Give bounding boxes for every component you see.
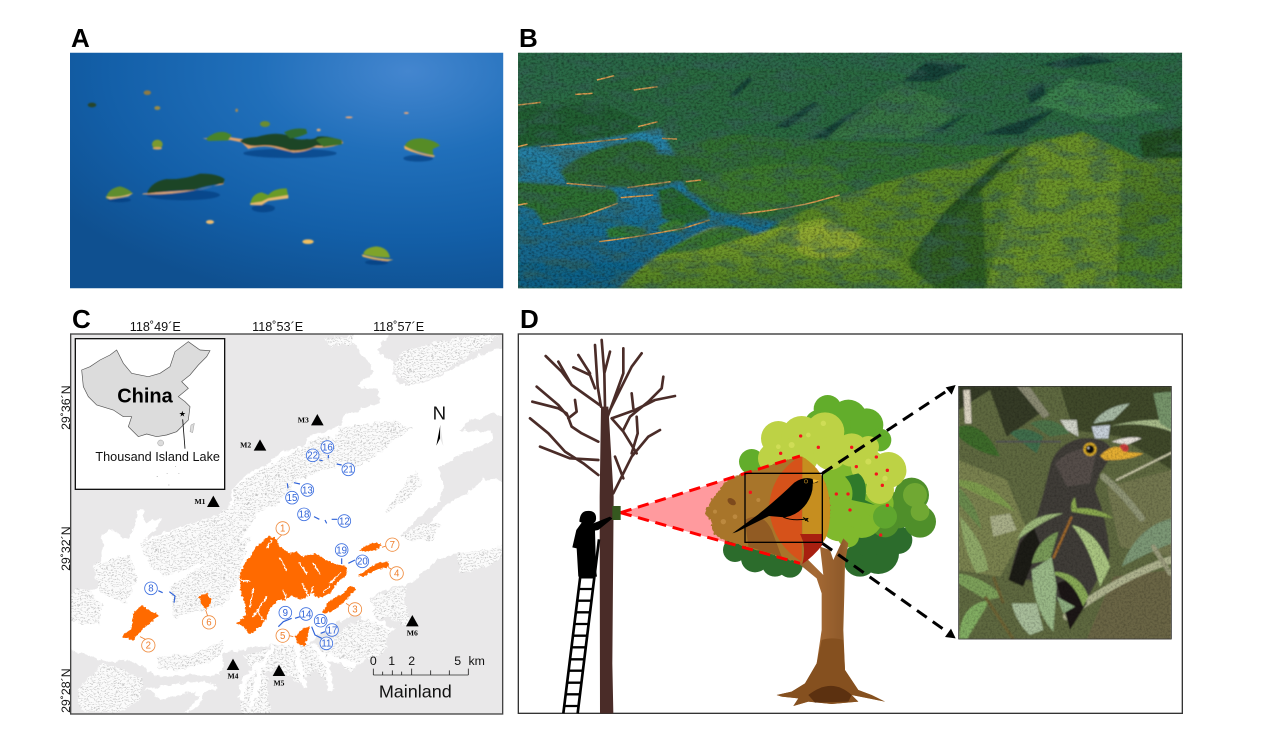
photo: branches	[997, 442, 1172, 617]
longitude labels	[130, 320, 424, 334]
small islands	[88, 90, 440, 261]
scale bar: 0	[370, 654, 377, 668]
mid hills	[671, 135, 1052, 215]
blue marker numbers: 9	[283, 608, 288, 619]
blue marker numbers: 22	[307, 451, 318, 462]
orange numbered markers	[142, 522, 403, 652]
longitude labels: 118˚49´E	[130, 320, 181, 334]
person silhouette	[572, 511, 612, 577]
blue marker numbers: 20	[357, 557, 368, 568]
narrow inlets on the south shore	[242, 643, 357, 707]
camera	[612, 506, 621, 520]
longitude labels: 118˚53´E	[252, 320, 303, 334]
inset map of China	[75, 339, 225, 489]
canopy: right olive foliage	[871, 478, 936, 538]
mainland sites M1 to M6: M1	[194, 497, 206, 506]
orange marker numbers: 2	[146, 641, 151, 652]
canopy: yellow-green foliage	[758, 412, 906, 504]
canopy: dark lower foliage	[723, 523, 912, 578]
dashed arrow to photo, bottom	[822, 543, 956, 638]
orange marker numbers: 4	[394, 569, 400, 580]
blue marker numbers: 16	[322, 442, 333, 453]
island shadows	[108, 149, 433, 265]
longitude labels: 118˚57´E	[373, 320, 424, 334]
canopy: lighter leaf dots	[776, 421, 888, 481]
orange study islands 1 to 7	[122, 536, 389, 647]
Mainland label: Mainland	[379, 681, 452, 701]
blue marker numbers: 18	[299, 510, 309, 521]
latitude labels: 29˚36´N	[59, 385, 73, 430]
ladder	[563, 539, 599, 713]
shoreline	[518, 76, 840, 242]
white inlets on the main island	[240, 540, 340, 620]
blue study islands 8 to 22	[158, 455, 355, 638]
north arrow: N	[433, 402, 446, 423]
blue marker numbers: 19	[336, 545, 347, 556]
blue marker numbers	[148, 442, 368, 650]
mainland sites M1 to M6: M3	[298, 415, 309, 424]
dashed arrow to photo, top	[822, 385, 956, 473]
bird silhouette	[732, 478, 819, 533]
mainland sites M1 to M6	[194, 414, 419, 687]
lake water	[63, 328, 508, 677]
orange marker numbers: 5	[280, 631, 285, 642]
panel D photo: bird with fruit in foliage	[958, 386, 1172, 639]
far hills	[518, 62, 1182, 158]
island: lower long	[142, 182, 224, 194]
photo: background blotches	[958, 386, 1172, 639]
red fruits	[779, 434, 889, 537]
photo: eye	[1083, 443, 1097, 456]
mainland sites M1 to M6: M4	[227, 672, 239, 681]
panel C: study-area map	[59, 320, 508, 714]
blue marker numbers: 10	[315, 616, 326, 627]
photo: blackbird	[1008, 437, 1143, 630]
blue numbered markers	[145, 441, 369, 650]
forest mottling	[518, 53, 1182, 288]
latitude labels: 29˚28´N	[59, 668, 73, 713]
camera view cone	[621, 456, 830, 564]
right mountain	[779, 132, 1182, 288]
blue marker numbers: 21	[343, 465, 354, 476]
islands	[559, 139, 684, 188]
panel B: aerial photo of forested hills and lake	[518, 53, 1182, 288]
speckled island clusters	[71, 335, 503, 714]
blue marker numbers: 17	[327, 625, 337, 636]
canopy: top mid-green foliage	[739, 395, 891, 482]
panel frame	[518, 334, 1182, 713]
scale bar: 5	[454, 654, 461, 668]
blue marker numbers: 12	[339, 516, 350, 527]
panel label A: A	[71, 23, 90, 53]
north arrow	[433, 402, 446, 446]
right-hand and northern mainland	[378, 334, 502, 386]
water	[518, 127, 779, 288]
mainland sites M1 to M6: M2	[240, 440, 251, 449]
blue marker numbers: 8	[148, 584, 154, 595]
leader lines	[140, 534, 392, 640]
orange marker numbers: 7	[390, 540, 395, 551]
latitude labels	[59, 385, 73, 713]
panel label C: C	[72, 304, 91, 334]
canopy: central bright foliage	[819, 463, 894, 547]
inset map of China: Thousand Island Lake	[95, 450, 220, 464]
blue marker numbers: 14	[301, 609, 312, 620]
photo frame	[958, 386, 1172, 639]
blue marker numbers: 15	[287, 493, 297, 504]
photo: grain	[958, 386, 1172, 639]
scale bar: 1	[388, 654, 395, 668]
mainland sites M1 to M6: M6	[407, 629, 418, 638]
pink camera view beam	[621, 456, 800, 563]
scale bar	[370, 654, 485, 675]
left foreground hills	[619, 218, 935, 288]
panel D: canopy observation diagram	[518, 334, 1182, 713]
orange marker numbers	[146, 524, 400, 652]
photo: beak and fruit	[1112, 437, 1142, 445]
photo: foreground leaves	[985, 497, 1113, 639]
forest grain	[518, 53, 1182, 288]
latitude labels: 29˚32´N	[59, 526, 73, 571]
scale bar: km	[468, 654, 485, 668]
bare observation tree	[530, 340, 675, 713]
zoom frame	[745, 473, 822, 542]
mainland sites M1 to M6: M5	[273, 678, 285, 687]
inset map of China: ★	[179, 409, 186, 418]
blue marker numbers: 11	[321, 639, 331, 650]
panel label B: B	[519, 23, 538, 53]
map frame	[71, 334, 503, 714]
photo: background leaves	[958, 392, 1172, 639]
inset map of China: China	[117, 386, 174, 408]
orange marker numbers: 6	[206, 618, 212, 629]
orange marker numbers: 3	[352, 605, 358, 616]
panel A: aerial photo of lake islands	[70, 53, 503, 288]
fruiting tree trunk	[777, 538, 885, 706]
blue marker numbers: 13	[302, 485, 313, 496]
fruiting tree canopy	[723, 395, 936, 578]
island: central large	[203, 128, 343, 152]
panel label D: D	[520, 304, 539, 334]
scale bar: 2	[408, 654, 415, 668]
orange marker numbers: 1	[280, 524, 285, 535]
